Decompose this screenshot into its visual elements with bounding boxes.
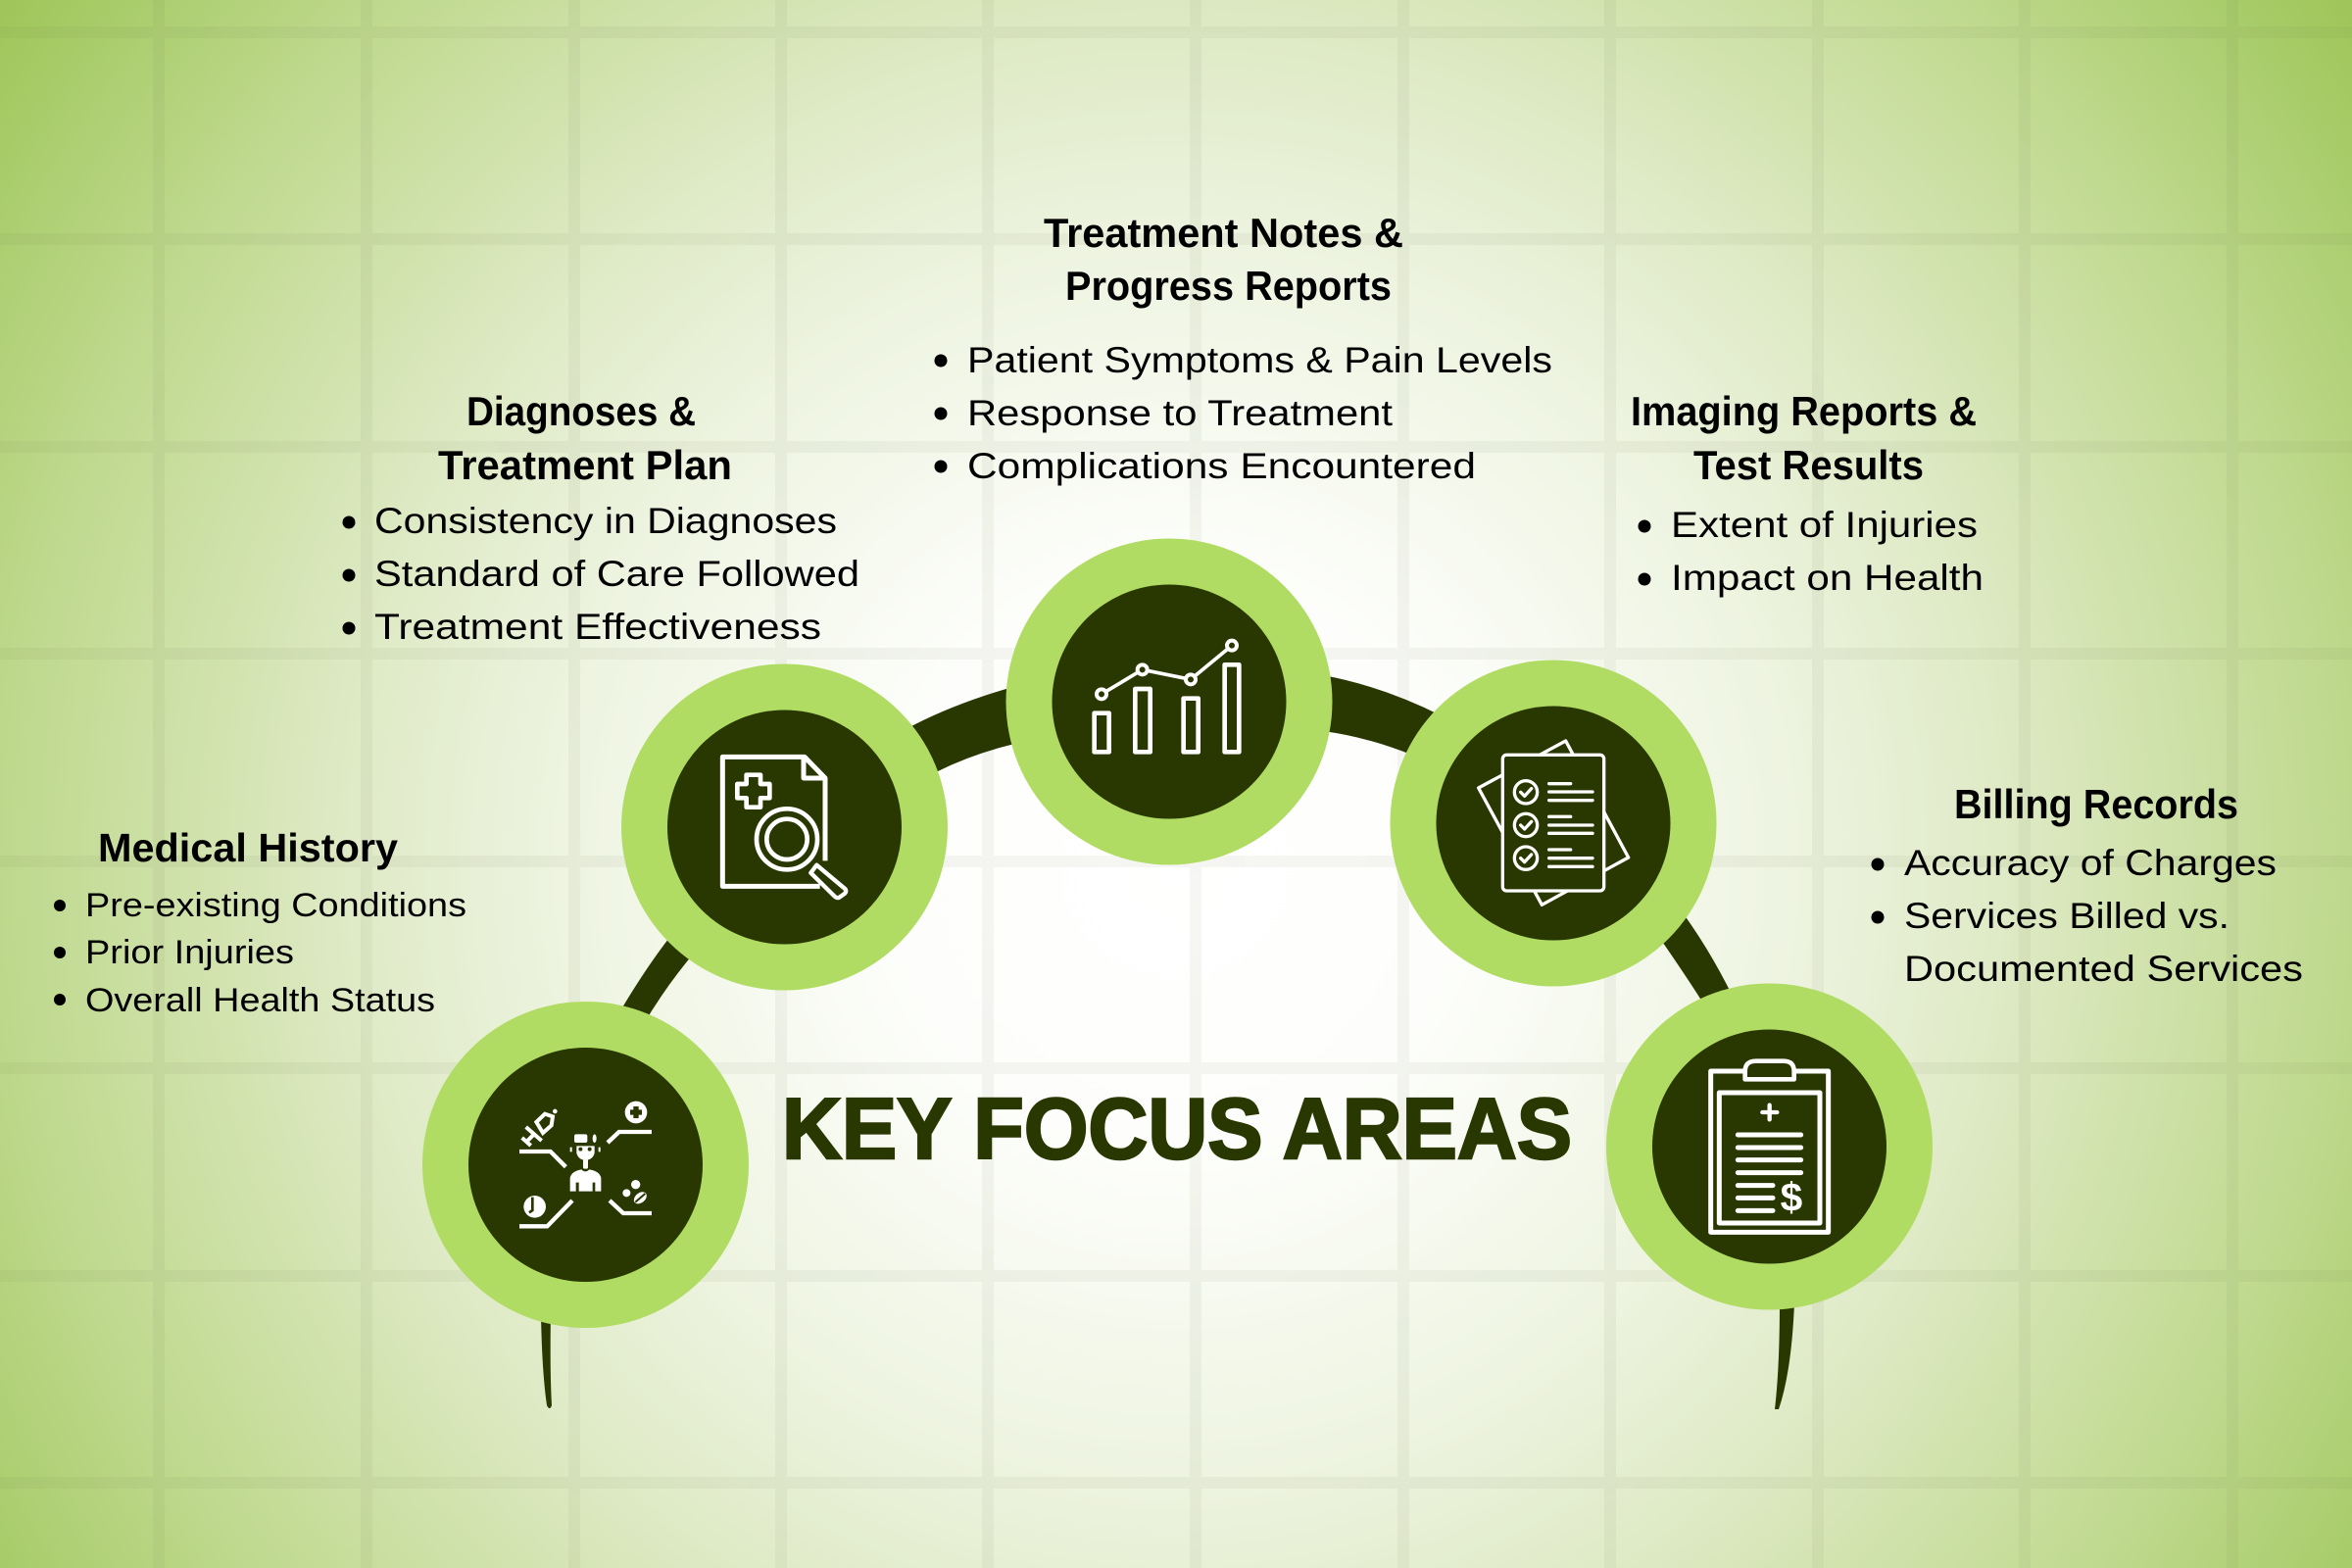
list: medical history items: Overall Health Status <box>85 982 435 1019</box>
heading: diagnoses and treatment plan <box>438 388 732 488</box>
icon: clipboard with dollar sign: $ <box>1781 1174 1803 1219</box>
panel: treatment notes and progress reports <box>935 210 1552 486</box>
heading: imaging reports and test results: Test Results <box>1693 442 1924 488</box>
panel: diagnoses and treatment plan <box>343 388 859 647</box>
list: treatment notes items <box>935 339 1552 486</box>
curved arc connector with tapered tails <box>541 675 1794 1409</box>
list: billing items: Accuracy of Charges <box>1904 842 2277 883</box>
list: diagnoses items: Treatment Effectiveness <box>374 606 821 647</box>
panel: medical history <box>54 825 466 1019</box>
heading: treatment notes and progress reports <box>1044 210 1403 309</box>
list: diagnoses items: Consistency in Diagnoses <box>374 500 837 541</box>
panel: billing records <box>1872 781 2303 989</box>
node: medical history circle <box>422 1002 749 1328</box>
heading: treatment notes and progress reports: Treatment Notes & <box>1044 210 1403 256</box>
icon: bar and line chart <box>1095 641 1239 752</box>
list: treatment notes items: Complications Encountered <box>967 445 1476 486</box>
node: imaging reports circle <box>1390 661 1717 986</box>
heading: imaging reports and test results <box>1631 388 1977 488</box>
list: billing items: Documented Services <box>1904 948 2303 989</box>
heading: billing records: Billing Records <box>1954 781 2238 827</box>
list: billing items: Services Billed vs. <box>1904 895 2230 936</box>
heading: treatment notes and progress reports: Progress Reports <box>1065 263 1392 309</box>
heading: diagnoses and treatment plan: Treatment Plan <box>438 442 732 488</box>
list: imaging items <box>1639 504 1984 598</box>
list: billing items <box>1872 842 2303 989</box>
icon: patient with medical items <box>519 1102 652 1226</box>
icon: medical document with magnifier <box>722 757 846 898</box>
title: KEY FOCUS AREAS <box>782 1080 1572 1177</box>
node: diagnoses circle <box>621 664 948 990</box>
heading: diagnoses and treatment plan: Diagnoses & <box>466 388 696 434</box>
node: treatment notes circle <box>1005 539 1333 864</box>
icon: clipboard with dollar sign <box>1711 1061 1829 1232</box>
list: medical history items: Pre-existing Conditions <box>85 887 466 924</box>
list: diagnoses items <box>343 500 859 647</box>
list: medical history items: Prior Injuries <box>85 934 294 971</box>
list: imaging items: Impact on Health <box>1671 557 1984 598</box>
heading: medical history: Medical History <box>98 825 398 870</box>
list: treatment notes items: Response to Treatment <box>967 392 1394 433</box>
icon: checklist papers <box>1479 741 1629 905</box>
list: treatment notes items: Patient Symptoms & Pain Levels <box>967 339 1552 380</box>
list: medical history items <box>54 887 466 1019</box>
list: diagnoses items: Standard of Care Followed <box>374 553 859 594</box>
node: billing records circle <box>1606 984 1933 1309</box>
heading: imaging reports and test results: Imaging Reports & <box>1631 388 1977 434</box>
panel: imaging reports and test results <box>1631 388 1984 598</box>
list: imaging items: Extent of Injuries <box>1671 504 1978 545</box>
